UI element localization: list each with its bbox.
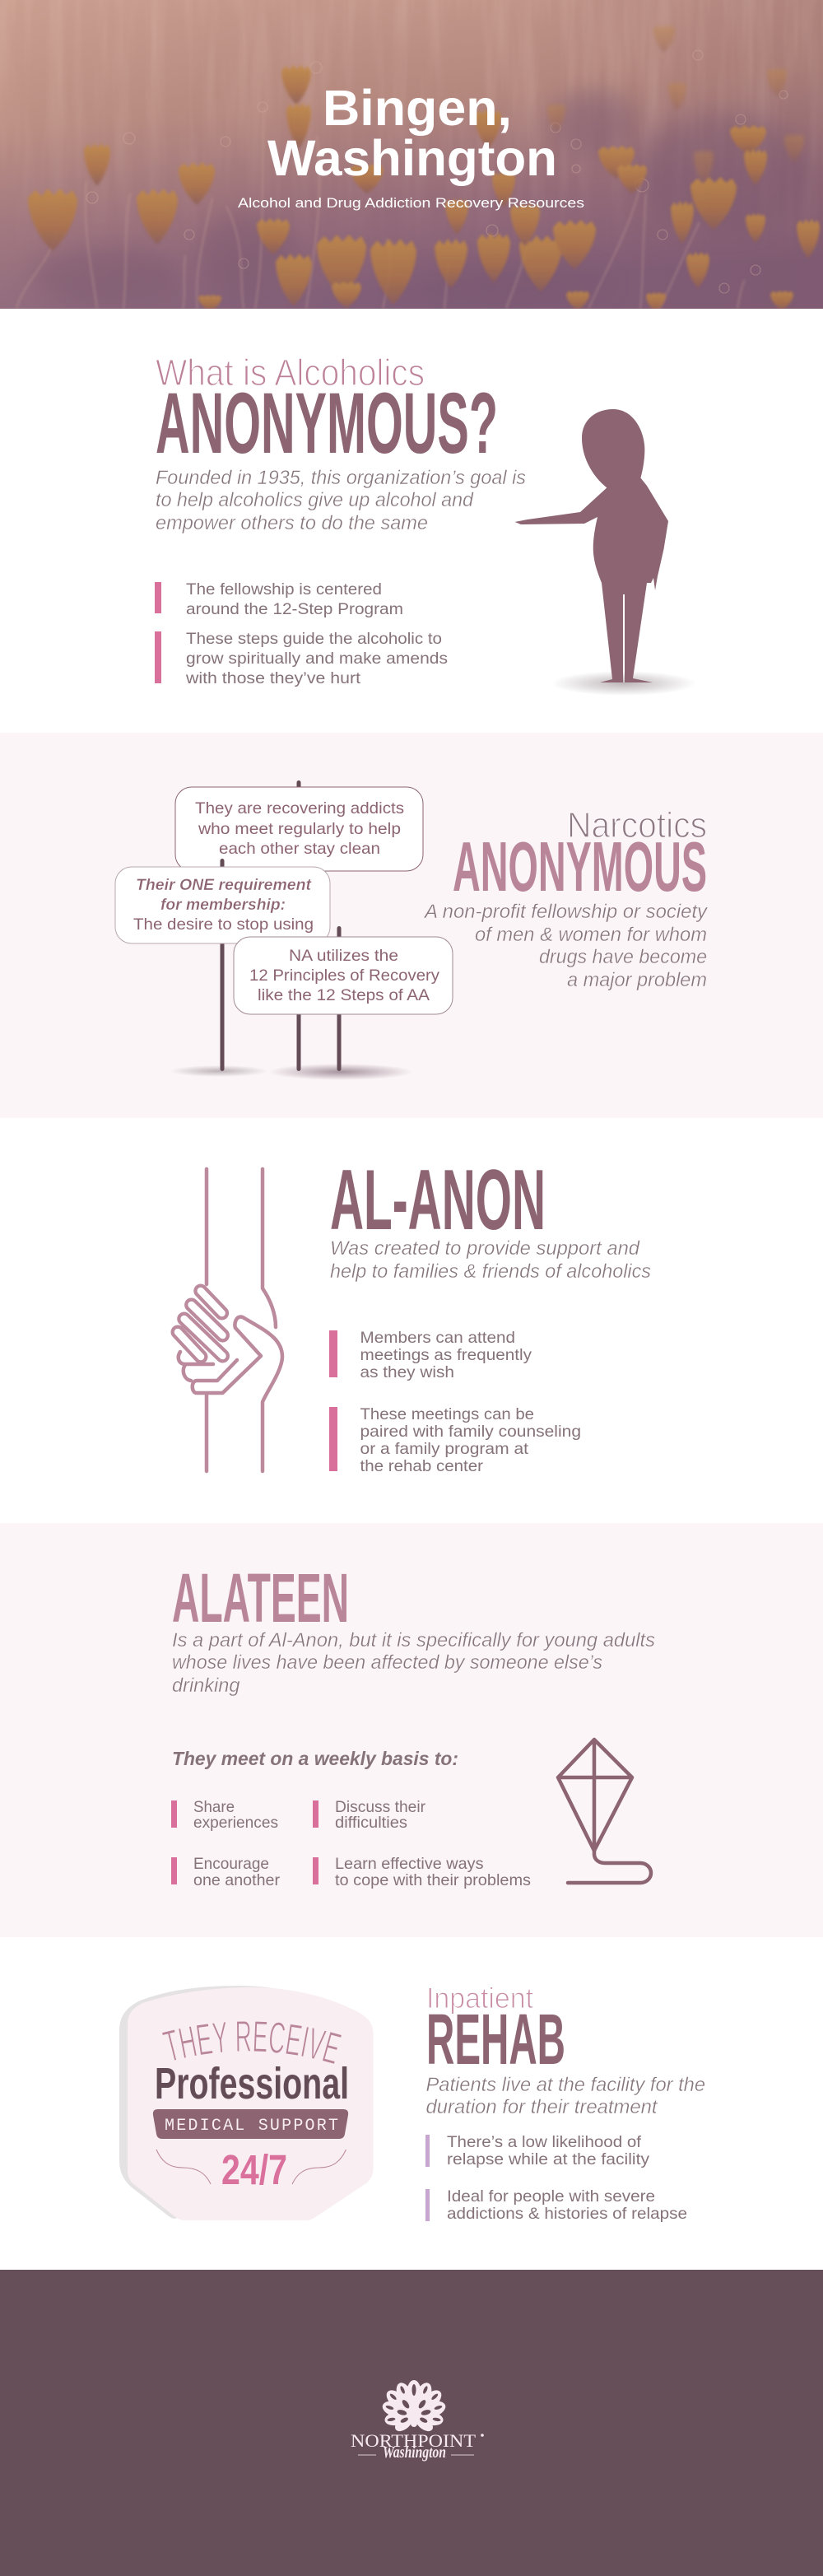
lower, saturated flowers <box>28 65 820 312</box>
sign: one requirement: The desire to stop using <box>133 915 314 934</box>
heading: Inpatient <box>426 1982 533 2015</box>
bullet: family counseling: These meetings can be <box>360 1405 534 1423</box>
bullet: share: experiences <box>193 1814 278 1832</box>
description: a major problem <box>567 969 707 991</box>
bullet: discuss: Discuss their <box>335 1798 425 1816</box>
sign: one requirement: Their ONE requirement <box>136 876 312 894</box>
bullet: family counseling <box>329 1405 581 1475</box>
sign: recovering addicts: each other stay clean <box>219 840 380 858</box>
heading <box>426 1982 565 2080</box>
heading: REHAB <box>426 2000 565 2080</box>
description: empower others to do the same <box>156 512 428 534</box>
sign: recovering addicts <box>175 787 423 871</box>
wordmark: NORTHPOINT <box>351 2430 477 2451</box>
icon: helping hands <box>178 1169 282 1471</box>
bullet: ideal for <box>425 2187 687 2223</box>
sign: recovering addicts: who meet regularly to help <box>198 820 401 838</box>
heading: AL-ANON <box>330 1153 546 1248</box>
title: Washington <box>267 130 557 186</box>
description: Was created to provide support and <box>330 1237 640 1260</box>
field of flowers photo <box>16 25 820 312</box>
upper, hazy flowers <box>547 25 804 185</box>
bullet: steps guide: with those they’ve hurt <box>185 669 361 687</box>
description: Patients live at the facility for the <box>426 2074 705 2096</box>
icon: kite <box>558 1740 651 1883</box>
bullet: learn <box>313 1855 531 1889</box>
bullet: discuss <box>313 1798 425 1832</box>
banner <box>153 2109 348 2139</box>
location tagline: Washington <box>383 2443 446 2462</box>
bullet: low likelihood <box>425 2133 649 2168</box>
bullet: learn: to cope with their problems <box>335 1871 531 1889</box>
heading <box>453 805 707 906</box>
title: Bingen, <box>323 80 512 136</box>
bullet: family counseling: the rehab center <box>360 1457 484 1475</box>
description <box>172 1629 655 1697</box>
subtitle: Alcohol and Drug Addiction Recovery Resources <box>238 195 584 211</box>
bullet: encourage: one another <box>193 1871 281 1889</box>
heading: ANONYMOUS? <box>156 375 498 472</box>
description: duration for their treatment <box>426 2096 658 2118</box>
bullet: family counseling: or a family program at <box>360 1440 529 1458</box>
icon: lotus flower <box>380 2380 448 2434</box>
bullet: members attend: Members can attend <box>360 1329 515 1347</box>
logo <box>351 2380 484 2462</box>
bullet: 12-step program <box>155 580 403 618</box>
heading: Narcotics <box>567 805 707 845</box>
bullet: members attend: meetings as frequently <box>360 1346 532 1364</box>
description: to help alcoholics give up alcohol and <box>156 489 474 511</box>
bullet: steps guide <box>155 630 448 687</box>
heading <box>156 352 498 472</box>
curved text: THEY RECEIVE <box>162 2022 342 2064</box>
description: drugs have become <box>539 946 707 968</box>
badge <box>119 1986 374 2220</box>
description <box>423 901 709 991</box>
bullet: low likelihood: There’s a low likelihood of <box>447 2133 642 2151</box>
sign: 12 principles: like the 12 Steps of AA <box>258 986 430 1004</box>
sign: 12 principles: NA utilizes the <box>289 947 398 965</box>
sign: 12 principles <box>234 937 453 1014</box>
subheading: They meet on a weekly basis to: <box>172 1748 458 1769</box>
description: drinking <box>172 1675 240 1697</box>
bullet: members attend <box>329 1329 532 1381</box>
bullet: ideal for: Ideal for people with severe <box>447 2187 655 2206</box>
bullet: learn: Learn effective ways <box>335 1855 484 1873</box>
panel: what is Alcoholics Anonymous <box>0 309 823 733</box>
bullet: members attend: as they wish <box>360 1363 454 1381</box>
bullet: family counseling: paired with family counseling <box>360 1423 581 1441</box>
description <box>426 2074 705 2118</box>
panel: footer <box>0 2270 823 2576</box>
bullet: steps guide: These steps guide the alcoholic to <box>186 630 442 648</box>
bullet: encourage <box>171 1855 281 1889</box>
bullet: 12-step program: around the 12-Step Program <box>186 600 403 618</box>
signposts <box>115 780 453 1080</box>
bullet: ideal for: addictions & histories of relapse <box>447 2205 687 2223</box>
sign: one requirement <box>115 867 330 943</box>
description <box>330 1237 651 1283</box>
bullet: share <box>171 1798 278 1832</box>
panel: Al-Anon <box>0 1118 823 1523</box>
bullet: low likelihood: relapse while at the facility <box>447 2150 649 2168</box>
bullet: encourage: Encourage <box>193 1855 269 1873</box>
sign: one requirement: for membership: <box>160 896 286 914</box>
description: whose lives have been affected by someone else’s <box>172 1651 602 1674</box>
description: Is a part of Al-Anon, but it is specifically for young adults <box>172 1629 655 1651</box>
panel: inpatient rehab <box>119 1982 705 2223</box>
bullet: share: Share <box>193 1798 235 1816</box>
sign: 12 principles: 12 Principles of Recovery <box>249 967 439 985</box>
description: A non-profit fellowship or society <box>423 901 709 923</box>
sign: recovering addicts: They are recovering addicts <box>195 799 404 818</box>
title <box>267 80 557 186</box>
bullet: 12-step program: The fellowship is centered <box>186 580 382 599</box>
banner: MEDICAL SUPPORT <box>165 2117 338 2136</box>
panel: header photo with title <box>0 0 823 312</box>
professional: Professional <box>155 2059 349 2108</box>
description: Founded in 1935, this organization’s goal is <box>156 467 526 489</box>
heading: What is Alcoholics <box>156 352 425 394</box>
24/7: 24/7 <box>221 2146 287 2193</box>
bullet: discuss: difficulties <box>335 1814 407 1832</box>
bullet: steps guide: grow spiritually and make amends <box>186 650 448 668</box>
24/7 <box>156 2146 346 2193</box>
panel: Alateen <box>0 1523 823 1937</box>
description <box>156 467 526 534</box>
description: help to families & friends of alcoholics <box>330 1260 651 1283</box>
icon: person silhouette <box>515 409 696 696</box>
heading: ALATEEN <box>172 1559 349 1637</box>
panel: Narcotics Anonymous <box>0 733 823 1118</box>
description: of men & women for whom <box>475 924 707 946</box>
